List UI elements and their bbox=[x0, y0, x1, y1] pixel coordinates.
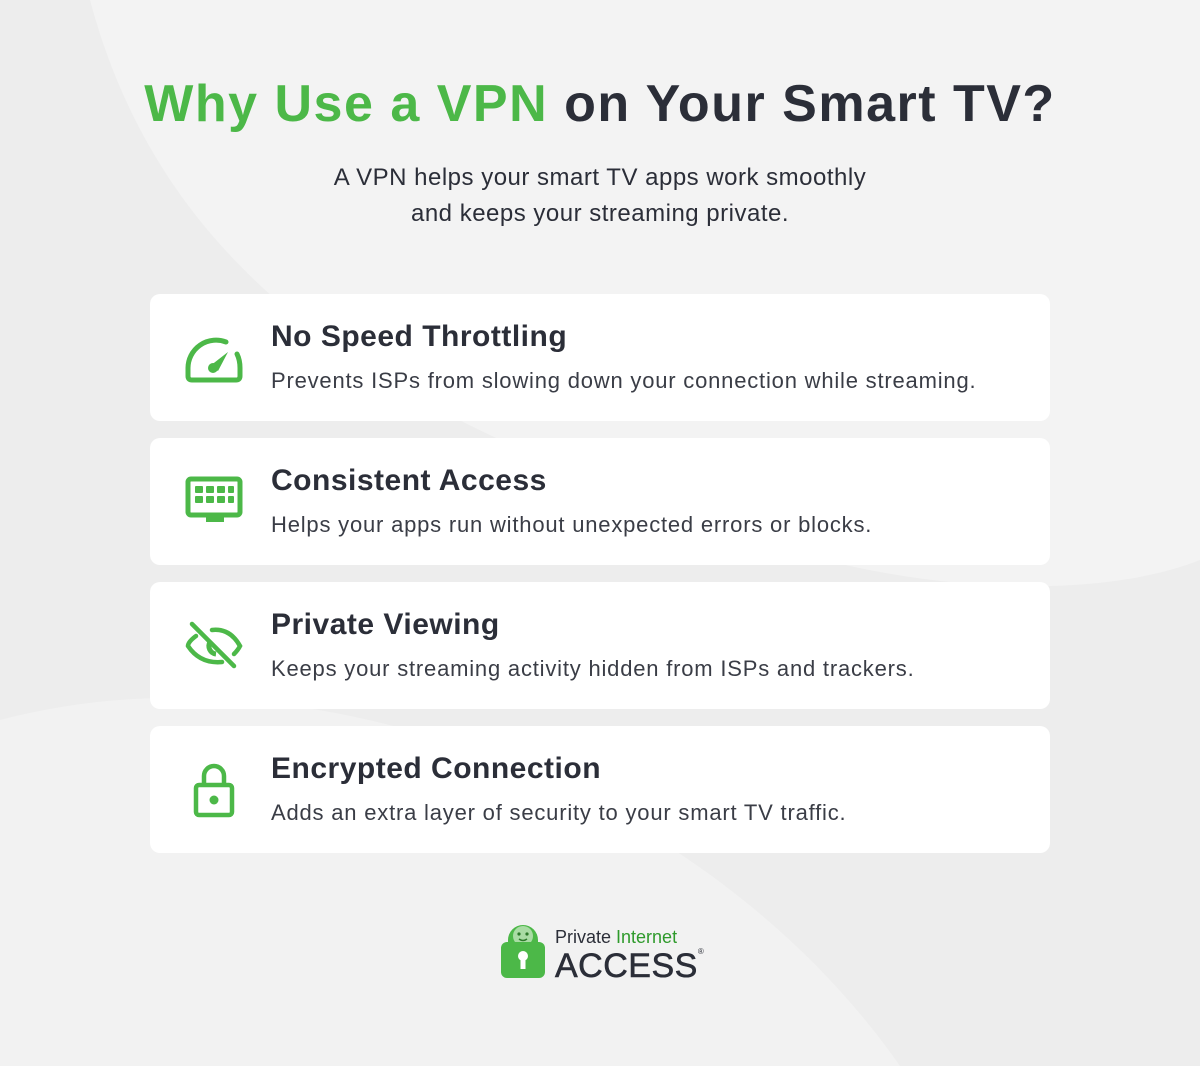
card: no speed throttling: No Speed Throttling bbox=[271, 320, 567, 353]
subtitle: and keeps your streaming private. bbox=[411, 200, 789, 227]
icon: padlock bbox=[194, 764, 234, 818]
card: encrypted connection: Adds an extra layer of security to your smart TV traffic. bbox=[271, 800, 846, 825]
title: Why Use a VPN on Your Smart TV? bbox=[144, 75, 1056, 133]
logo: ACCESS® bbox=[555, 947, 704, 985]
card: consistent access bbox=[150, 438, 1050, 565]
icon: speedometer bbox=[186, 338, 242, 382]
card: private viewing: Keeps your streaming activity hidden from ISPs and trackers. bbox=[271, 656, 914, 681]
card: consistent access: Consistent Access bbox=[271, 464, 547, 497]
card: encrypted connection: Encrypted Connection bbox=[271, 752, 601, 785]
card: private viewing: Private Viewing bbox=[271, 608, 500, 641]
logo bbox=[501, 925, 704, 985]
card: no speed throttling bbox=[150, 294, 1050, 421]
card: no speed throttling: Prevents ISPs from slowing down your connection while streaming. bbox=[271, 368, 976, 393]
icon: tv grid bbox=[186, 476, 242, 522]
card: encrypted connection bbox=[150, 726, 1050, 853]
card: private viewing bbox=[150, 582, 1050, 709]
logo: Private Internet bbox=[555, 927, 677, 947]
card: consistent access: Helps your apps run without unexpected errors or blocks. bbox=[271, 512, 872, 537]
icon: eye off bbox=[186, 622, 242, 668]
subtitle bbox=[334, 164, 866, 227]
subtitle: A VPN helps your smart TV apps work smoothly bbox=[334, 164, 866, 191]
